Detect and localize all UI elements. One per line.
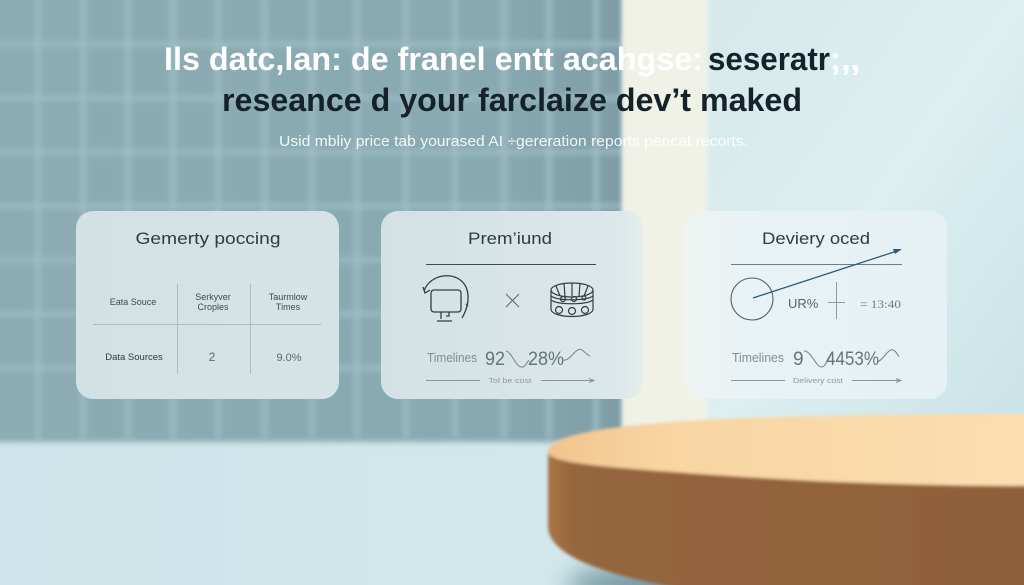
table: 2 [209, 350, 216, 364]
icon: circle [731, 278, 773, 320]
table [93, 284, 321, 374]
orange cylinder pedestal [548, 414, 1024, 585]
formula row [788, 282, 901, 319]
table: 9.0% [276, 352, 302, 364]
table: Croples [197, 302, 229, 312]
timelines stats [732, 349, 899, 370]
footer arrow label [731, 376, 901, 385]
table: Eata Souce [110, 297, 156, 307]
panel: Premiund [381, 211, 643, 399]
icon: monitor with refresh arrows [423, 276, 468, 321]
footer arrow label: Delivery cost [793, 376, 844, 385]
footer arrow label [426, 378, 594, 385]
icon: ornate drum [551, 283, 593, 316]
title [164, 41, 860, 118]
table: Serkyver [195, 292, 231, 302]
formula row: = 13:40 [860, 297, 901, 311]
table: Data Sources [105, 352, 163, 363]
timelines stats: 4453% [826, 349, 879, 370]
title: ;,, [830, 41, 860, 77]
table: Taurmlow [269, 292, 308, 302]
pedestal shadow [565, 564, 815, 585]
title: seseratr [708, 41, 830, 77]
heading: Deviery oced [762, 229, 870, 248]
timelines stats [427, 349, 590, 370]
heading: Prem’iund [468, 229, 552, 248]
formula row: UR% [788, 296, 819, 311]
title: Ils datc,lan: de franel entt acahgse: [164, 41, 703, 77]
timelines stats: Timelines [732, 351, 784, 365]
icon: multiply sign [506, 294, 519, 307]
timelines stats: Timelines [427, 351, 477, 365]
panel: Gemerty poccing [76, 211, 339, 399]
title: reseance d your farclaize dev’t maked [222, 82, 802, 118]
panel: Deviery oced [685, 211, 947, 399]
footer arrow label: Tol be cost [488, 378, 532, 385]
arrow: rising trend [753, 249, 902, 298]
table: Times [276, 302, 301, 312]
subtitle: Usid mbliy price tab yourased AI ÷gereration reports pericat recorts. [279, 133, 748, 150]
heading: Gemerty poccing [136, 229, 280, 248]
timelines stats: 28% [528, 349, 564, 370]
timelines stats: 9 [793, 349, 804, 370]
timelines stats: 92 [485, 349, 505, 370]
